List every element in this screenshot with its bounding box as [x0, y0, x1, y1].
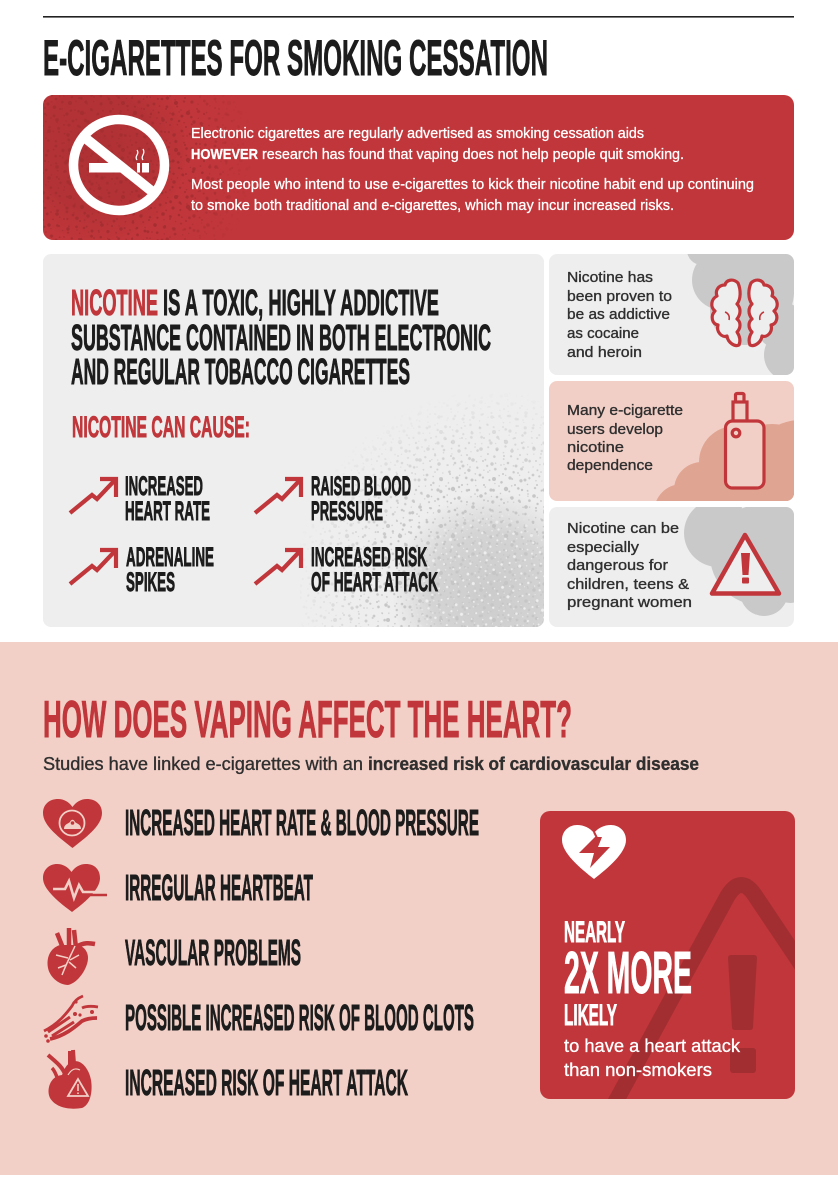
icon: vape device [726, 394, 764, 488]
list item: increased risk of heart attack: INCREASED RISK [311, 542, 427, 572]
icon: brain [712, 280, 777, 346]
list item: raised blood pressure [255, 471, 411, 526]
list item: raised blood pressure: PRESSURE [311, 496, 383, 526]
card: addictive as cocaine and heroin: and heroin [567, 344, 642, 361]
card: addictive as cocaine and heroin: be as addictive [567, 306, 670, 323]
text: intro copy: research has found that vaping does not help people quit smoking. [262, 147, 684, 163]
card: addictive as cocaine and heroin: been proven to [567, 288, 672, 305]
text: intro copy: Electronic cigarettes are regularly advertised as smoking cessation aids [191, 126, 644, 142]
text: intro copy [191, 126, 754, 214]
list item: increased risk of heart attack: OF HEART ATTACK [311, 567, 438, 597]
icon: broken heart [562, 825, 626, 879]
callout: nearly 2x more likely: LIKELY [564, 999, 617, 1032]
list item: adrenaline spikes: SPIKES [126, 567, 175, 597]
panel: how vaping affects the heart: IRREGULAR HEARTBEAT [125, 867, 313, 908]
list item: adrenaline spikes [70, 542, 214, 597]
callout: nearly 2x more likely: 2X MORE [564, 940, 692, 1006]
heading: nicotine is toxic: IS A TOXIC, HIGHLY ADDICTIVE [163, 282, 439, 323]
text: intro copy: Most people who intend to use e-cigarettes to kick their nicotine habit end up continuing [191, 177, 754, 193]
card: dangerous for children, teens and pregnant women: Nicotine can be [567, 520, 679, 537]
panel: how vaping affects the heart [0, 642, 838, 1175]
list item: heart attack risk [48, 1050, 408, 1109]
card: nicotine dependence: Many e-cigarette [567, 402, 683, 419]
list item: irregular heartbeat [43, 864, 313, 912]
card: nicotine dependence: nicotine [567, 439, 624, 456]
list item: increased risk of heart attack [255, 542, 438, 597]
list item: vascular problems [48, 928, 301, 985]
text: intro copy: to smoke both traditional and e-cigarettes, which may incur increased risks. [191, 198, 674, 214]
subheading: studies [43, 754, 699, 774]
panel: how vaping affects the heart: INCREASED RISK OF HEART ATTACK [125, 1062, 408, 1103]
icon: warning triangle [712, 535, 779, 594]
heading: nicotine is toxic [71, 282, 491, 392]
card: dangerous for children, teens and pregnant women: children, teens & [567, 576, 689, 593]
panel: nicotine: ADRENALINE [126, 542, 214, 572]
heading: nicotine is toxic: AND REGULAR TOBACCO CIGARETTES [71, 351, 410, 392]
list item: heart rate and blood pressure [43, 799, 479, 848]
card: dangerous for children, teens and pregnant women: pregnant women [567, 594, 692, 611]
callout: nearly 2x more likely: to have a heart attack [564, 1036, 741, 1056]
panel: how vaping affects the heart: VASCULAR PROBLEMS [125, 932, 301, 973]
list item: increased heart rate: INCREASED [125, 471, 203, 501]
callout: nearly 2x more likely: NEARLY [564, 916, 625, 949]
icon: watermark warning triangle [608, 877, 795, 1099]
list item: blood clots [44, 996, 474, 1043]
panel: nicotine: HEART RATE [125, 496, 210, 526]
card: dangerous for children, teens and pregnant women: dangerous for [567, 557, 668, 574]
callout: nearly 2x more likely: than non-smokers [564, 1060, 712, 1080]
card: addictive as cocaine and heroin: Nicotine has [567, 269, 653, 286]
subheading: studies: increased risk of cardiovascular disease [368, 754, 699, 774]
list item: increased heart rate [70, 471, 210, 526]
card: addictive as cocaine and heroin: as cocaine [567, 325, 639, 342]
panel: nicotine: RAISED BLOOD [311, 471, 411, 501]
card: dangerous for children, teens and pregnant women [549, 507, 794, 627]
icon: no smoking [74, 120, 164, 210]
panel: nicotine [43, 254, 544, 627]
subheading: nicotine can cause: NICOTINE CAN CAUSE: [72, 411, 250, 444]
subheading: studies: Studies have linked e-cigarettes with an [43, 754, 363, 774]
callout: nearly 2x more likely [540, 811, 795, 1099]
card: dangerous for children, teens and pregnant women: especially [567, 539, 640, 556]
panel: intro banner [43, 95, 794, 240]
card: addictive as cocaine and heroin [549, 254, 794, 375]
card: nicotine dependence: users develop [567, 421, 663, 438]
card: nicotine dependence [549, 381, 794, 501]
heading: nicotine is toxic: NICOTINE [71, 282, 158, 323]
text: intro copy: HOWEVER [191, 147, 258, 163]
card: nicotine dependence: dependence [567, 457, 653, 474]
